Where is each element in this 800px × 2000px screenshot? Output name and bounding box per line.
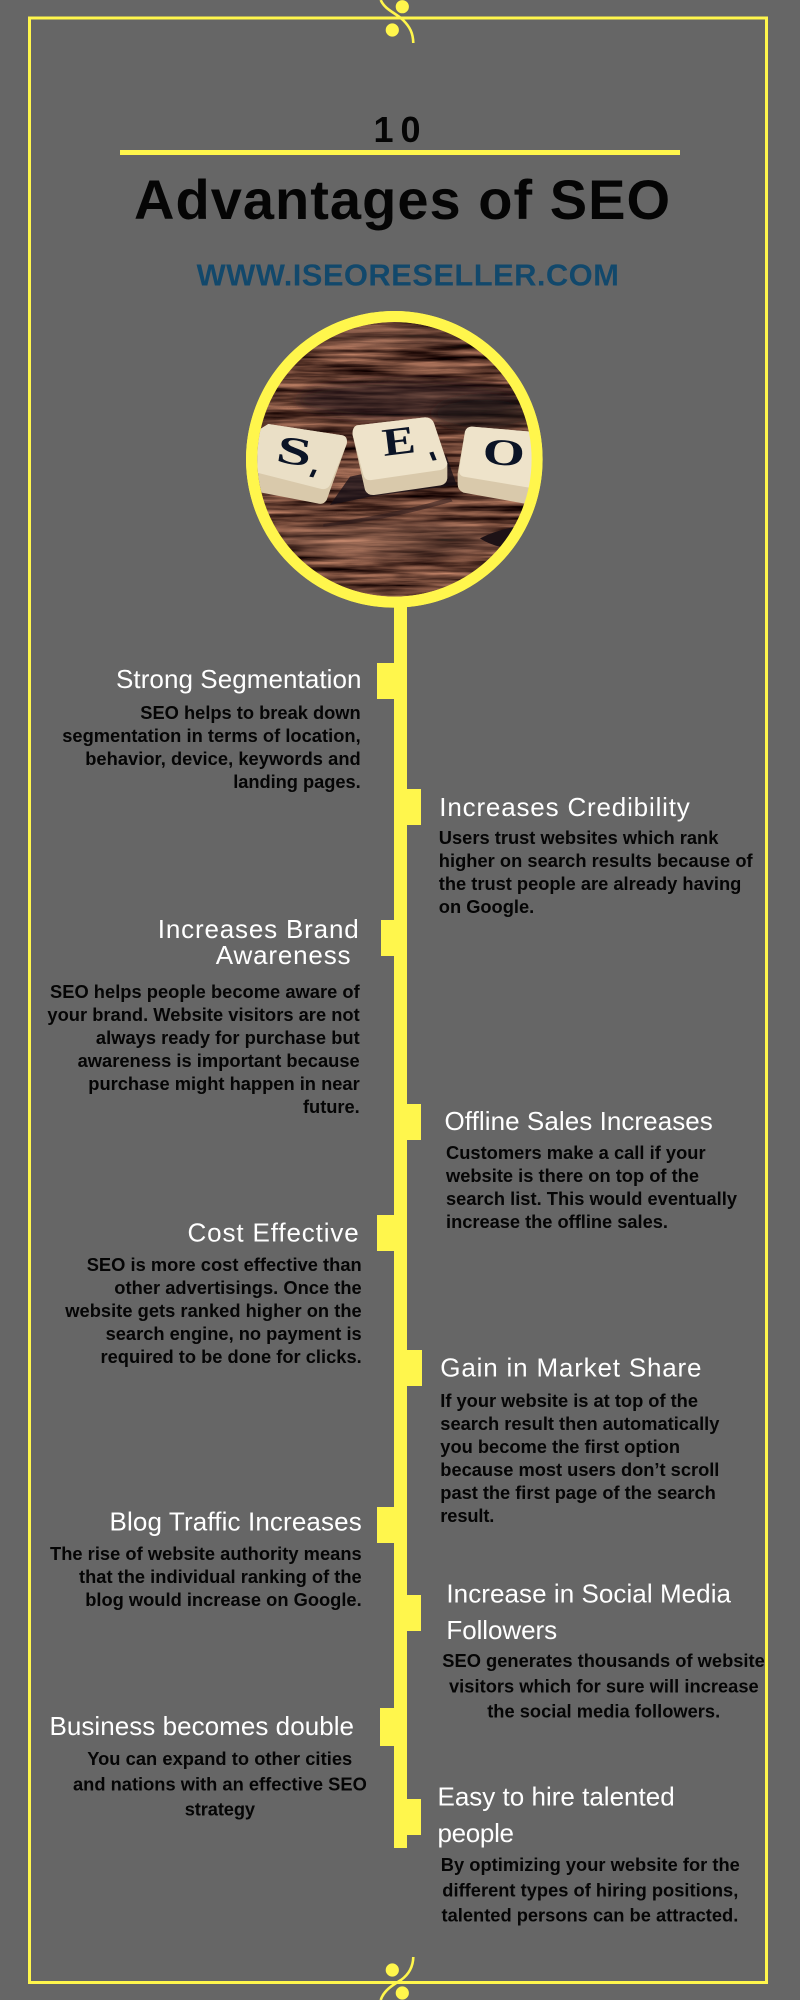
top ornament <box>360 0 420 43</box>
item: Easy to hire talented people <box>438 1782 740 1926</box>
item: Offline Sales Increases: website is there on top of the <box>445 1165 699 1186</box>
item: Offline Sales Increases: search list. This would eventually <box>446 1188 738 1209</box>
timeline tabs <box>377 663 422 1835</box>
item: Increases Credibility: the trust people are already having <box>439 873 741 894</box>
item: Increases Credibility: Increases Credibility <box>439 792 690 822</box>
item: Business becomes double: and nations with an effective SEO <box>73 1774 367 1794</box>
item: Increases Brand Awareness <box>47 914 361 1117</box>
item: Easy to hire talented people: people <box>438 1818 514 1848</box>
item: Blog Traffic Increases: Blog Traffic Increases <box>110 1506 362 1536</box>
item: Increase in Social Media Followers: visitors which for sure will increase <box>449 1676 759 1696</box>
item: Increase in Social Media Followers <box>442 1578 765 1722</box>
item: Increases Credibility <box>439 792 754 917</box>
item: Increase in Social Media Followers: the social media followers. <box>487 1700 720 1722</box>
item: Offline Sales Increases: increase the offline sales. <box>446 1211 668 1232</box>
item: Gain in Market Share: search result then automatically <box>440 1413 720 1434</box>
item: Gain in Market Share: because most users don’t scroll <box>440 1459 719 1480</box>
item: Strong Segmentation: landing pages. <box>233 771 361 792</box>
title: Advantages of SEO <box>134 168 670 231</box>
item: Offline Sales Increases: Offline Sales Increases <box>444 1106 713 1136</box>
item: Strong Segmentation: Strong Segmentation <box>116 664 362 694</box>
heading rule <box>120 150 680 155</box>
item: Increases Credibility: on Google. <box>439 896 534 917</box>
item: Cost Effective: website gets ranked higher on the <box>64 1300 362 1321</box>
item: Increases Credibility: higher on search results because of <box>439 850 754 871</box>
item: Easy to hire talented people: By optimizing your website for the <box>441 1854 740 1875</box>
item: Gain in Market Share <box>440 1352 720 1526</box>
item: Gain in Market Share: Gain in Market Share <box>440 1352 702 1382</box>
item: Gain in Market Share: If your website is at top of the <box>440 1390 698 1411</box>
item: Increases Brand Awareness: future. <box>303 1096 360 1117</box>
tile O <box>458 426 532 504</box>
item: Business becomes double: You can expand to other cities <box>87 1748 352 1769</box>
tile E <box>353 417 447 495</box>
bottom ornament <box>381 1957 413 2000</box>
item: Blog Traffic Increases: blog would increase on Google. <box>85 1589 362 1610</box>
item: Easy to hire talented people: different types of hiring positions, <box>442 1880 738 1900</box>
item: Increases Brand Awareness: awareness is important because <box>78 1050 360 1071</box>
photo circle: SEO tiles on wood <box>246 311 543 608</box>
item: Increase in Social Media Followers: Followers <box>446 1615 557 1645</box>
item: Cost Effective: other advertisings. Once the <box>114 1277 362 1298</box>
item: Gain in Market Share: you become the first option <box>440 1436 680 1457</box>
tile O: O <box>481 431 526 475</box>
item: Cost Effective: SEO is more cost effective than <box>87 1254 362 1275</box>
item: Increases Brand Awareness: Increases Brand <box>158 914 359 944</box>
item: Cost Effective <box>64 1218 362 1367</box>
tile E: E <box>380 417 418 465</box>
item: Business becomes double: Business becomes double <box>50 1711 354 1741</box>
timeline spine <box>394 600 407 1848</box>
item: Cost Effective: search engine, no payment is <box>106 1323 362 1344</box>
item: Increase in Social Media Followers: SEO generates thousands of website <box>442 1650 765 1671</box>
item: Increases Brand Awareness: always ready for purchase but <box>96 1027 360 1048</box>
item: Business becomes double <box>50 1711 367 1820</box>
item: Strong Segmentation <box>62 664 361 792</box>
item: Gain in Market Share: past the first page of the search <box>440 1482 716 1503</box>
website url: WWW.ISEORESELLER.COM <box>196 258 619 292</box>
item: Strong Segmentation: behavior, device, keywords and <box>85 748 361 769</box>
item: Business becomes double: strategy <box>185 1798 256 1820</box>
item: Strong Segmentation: SEO helps to break down <box>140 702 361 723</box>
item: Cost Effective: Cost Effective <box>188 1218 359 1248</box>
item: Increases Brand Awareness: Awareness <box>216 940 350 970</box>
item: Strong Segmentation: segmentation in terms of location, <box>62 725 361 746</box>
item: Increases Credibility: Users trust websites which rank <box>439 827 719 848</box>
item: Easy to hire talented people: Easy to hire talented <box>438 1782 675 1812</box>
item: Increases Brand Awareness: SEO helps people become aware of <box>50 981 361 1002</box>
item: Blog Traffic Increases <box>50 1506 362 1610</box>
item: Increases Brand Awareness: purchase might happen in near <box>88 1073 360 1094</box>
item: Offline Sales Increases: Customers make a call if your <box>446 1142 706 1163</box>
item: Increases Brand Awareness: your brand. Website visitors are not <box>47 1004 360 1025</box>
heading number: 10 <box>374 109 420 150</box>
item: Cost Effective: required to be done for clicks. <box>100 1346 362 1367</box>
item: Offline Sales Increases <box>444 1106 738 1232</box>
tile S: S <box>274 427 315 476</box>
item: Blog Traffic Increases: that the individual ranking of the <box>79 1566 362 1587</box>
item: Gain in Market Share: result. <box>440 1505 494 1526</box>
item: Increase in Social Media Followers: Increase in Social Media <box>446 1578 732 1608</box>
tile S <box>253 424 347 504</box>
item: Blog Traffic Increases: The rise of website authority means <box>50 1543 362 1564</box>
item: Easy to hire talented people: talented persons can be attracted. <box>442 1904 738 1926</box>
